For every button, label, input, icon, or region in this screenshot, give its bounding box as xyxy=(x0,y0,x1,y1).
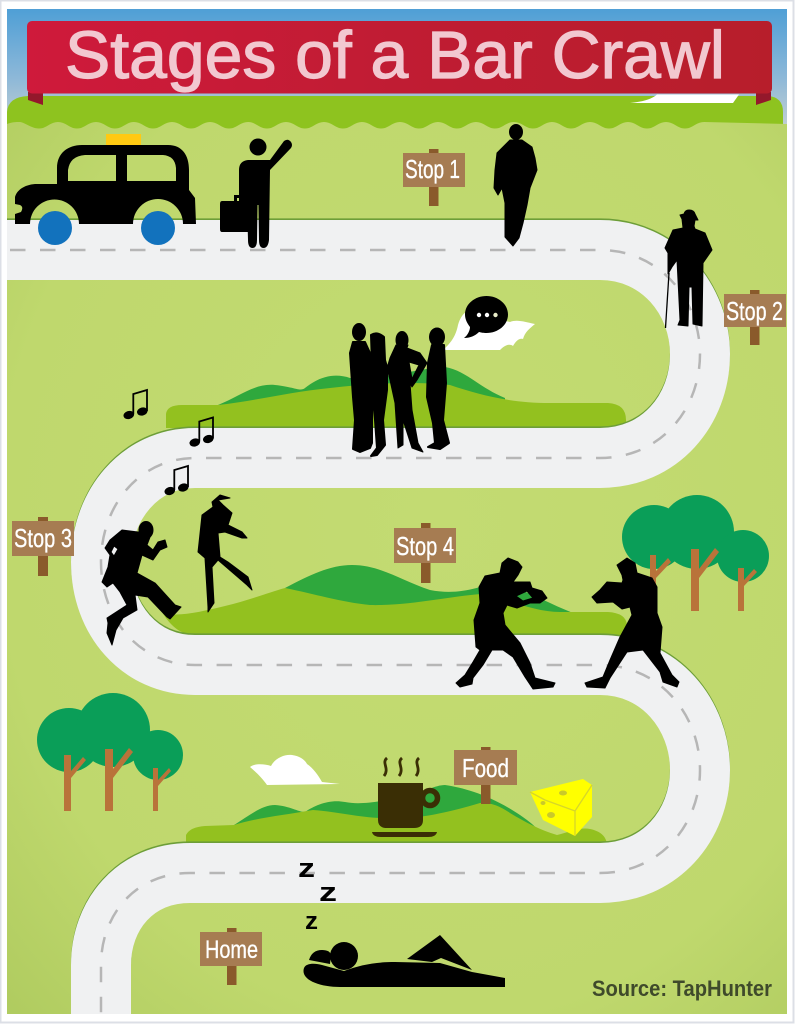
sign: Home: Home xyxy=(205,936,258,964)
icon: old man with cane xyxy=(665,210,712,328)
source credit: Source: TapHunter xyxy=(592,976,772,1001)
hill: middle xyxy=(166,367,626,428)
sign: Food: Food xyxy=(462,753,509,783)
sleep letters z z z: z xyxy=(305,908,318,935)
sleep letters z z z: z xyxy=(298,853,315,883)
banner left tail xyxy=(28,92,43,105)
sleep letters z z z xyxy=(298,853,337,935)
sky xyxy=(7,9,787,134)
sign: Stop 2 xyxy=(724,290,786,345)
icon: left boxer xyxy=(456,558,555,689)
trees: upper right xyxy=(622,495,769,611)
icon: right boxer xyxy=(585,558,679,688)
sign: Stop 3 xyxy=(12,517,74,576)
title: Stages of a Bar Crawl xyxy=(65,18,725,93)
taxi rear wheel xyxy=(141,211,175,245)
cup handle xyxy=(422,790,438,806)
top hedge band xyxy=(7,96,783,132)
cloud xyxy=(250,755,340,785)
sign: Stop 3: Stop 3 xyxy=(14,523,72,553)
icon: group of friends xyxy=(350,323,449,456)
hill: bottom xyxy=(186,785,607,844)
icon: sleeping person xyxy=(303,935,505,987)
sign: Stop 2: Stop 2 xyxy=(726,296,783,326)
sign: Home xyxy=(200,928,262,985)
saucer xyxy=(372,832,437,837)
icon: man hailing taxi with suitcase xyxy=(220,138,292,248)
sign: Stop 4: Stop 4 xyxy=(396,531,454,561)
sign: Stop 4 xyxy=(394,523,456,583)
steam xyxy=(384,758,419,776)
sleep letters z z z: z xyxy=(319,877,337,907)
white cloud strip xyxy=(630,94,739,103)
banner xyxy=(27,18,772,105)
icon: speech bubble xyxy=(464,296,508,338)
hill: lower xyxy=(162,565,627,635)
taxi front wheel xyxy=(38,211,72,245)
icon: dancing woman xyxy=(198,495,252,612)
taxi body xyxy=(15,145,196,224)
cloud behind speech bubble xyxy=(443,312,535,350)
banner right tail xyxy=(756,92,771,105)
sign: Stop 1 xyxy=(403,149,465,206)
icon: cheese xyxy=(530,779,592,836)
banner ribbon xyxy=(27,21,772,94)
road xyxy=(7,248,700,1014)
trees: lower left xyxy=(37,693,183,811)
sign: Food xyxy=(454,747,517,804)
sign: Stop 1: Stop 1 xyxy=(405,154,460,184)
taxi roof light xyxy=(106,134,141,146)
cup xyxy=(378,783,423,828)
icon: music note 2 xyxy=(189,418,215,448)
icon: coffee cup xyxy=(372,758,438,837)
icon: music note 1 xyxy=(123,390,149,420)
icon: walking man xyxy=(494,124,537,246)
icon: taxi xyxy=(15,134,196,245)
icon: music note 3 xyxy=(164,466,190,496)
icon: dancing man xyxy=(102,521,181,645)
